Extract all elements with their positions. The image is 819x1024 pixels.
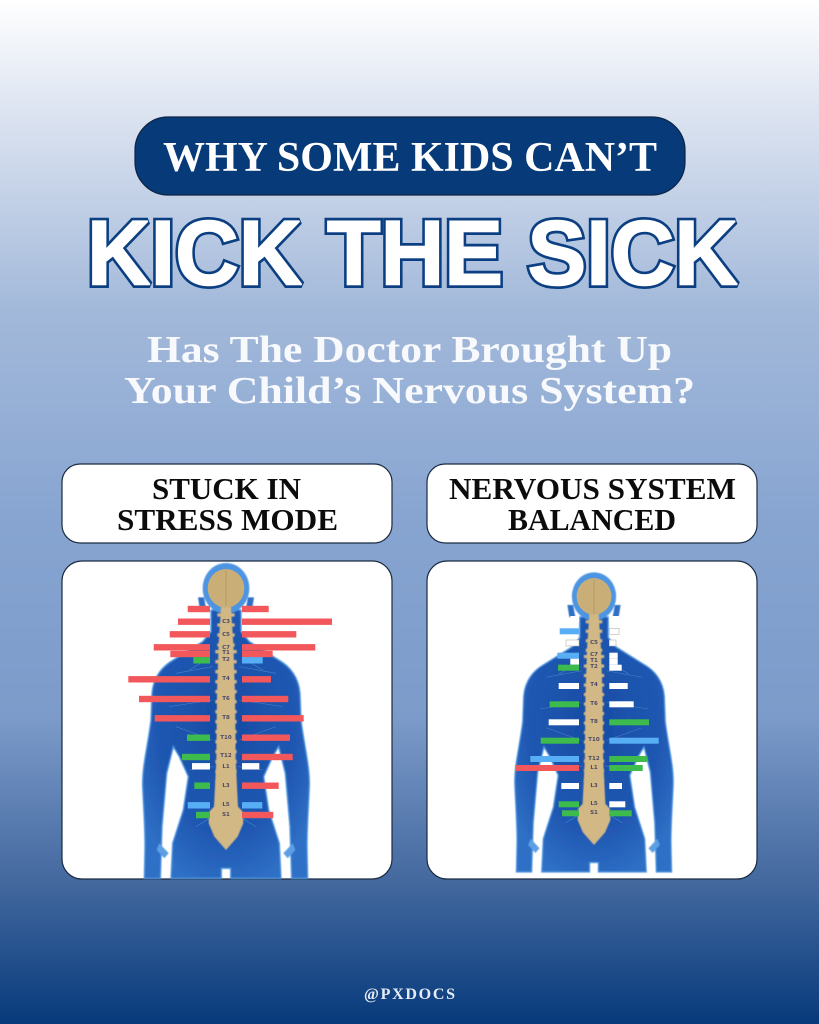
- spine level labels: [220, 619, 232, 818]
- footer handle: @PXDOCS: [364, 986, 455, 1003]
- spine level labels: T8: [222, 715, 230, 721]
- spine level labels: T6: [590, 701, 598, 707]
- spine level labels: L1: [590, 765, 598, 771]
- spine level labels: L3: [222, 783, 230, 789]
- label: nervous system balanced: NERVOUS SYSTEM: [449, 471, 736, 506]
- spine level labels: C5: [222, 632, 230, 638]
- spine level labels: T2: [590, 664, 598, 670]
- spine level labels: T8: [590, 719, 598, 725]
- spine level labels: T4: [222, 676, 230, 682]
- spine level labels: [588, 640, 600, 816]
- spine level labels: L3: [590, 783, 598, 789]
- label: stuck in stress mode: STUCK IN: [152, 471, 301, 506]
- spine level labels: C7: [222, 645, 230, 651]
- spine level labels: L5: [222, 802, 230, 808]
- spine level labels: T1: [590, 658, 598, 664]
- label: nervous system balanced: [427, 464, 757, 543]
- spine level labels: T4: [590, 682, 598, 688]
- spine level labels: S1: [222, 812, 230, 818]
- label: stuck in stress mode: STRESS MODE: [117, 502, 338, 537]
- spine level labels: T10: [588, 737, 600, 743]
- spine level labels: S1: [590, 810, 598, 816]
- spine level labels: C3: [222, 619, 230, 625]
- subtitle: Your Child’s Nervous System?: [124, 370, 695, 412]
- panel: stress mode spine chart: [62, 561, 392, 879]
- subtitle: [124, 329, 695, 412]
- title: kick the sick: KICK THE SICK: [87, 202, 738, 304]
- panel: balanced spine chart: [427, 561, 757, 879]
- figure: body and spine, stress mode: [143, 563, 309, 878]
- headline pill: WHY SOME KIDS CAN’T: [163, 135, 657, 181]
- spine level labels: T12: [588, 756, 600, 762]
- bars: left side: [515, 616, 579, 816]
- spine level labels: C7: [590, 652, 598, 658]
- spine level labels: T1: [222, 650, 230, 656]
- figure: body and spine, balanced: [515, 572, 673, 872]
- spine level labels: T2: [222, 657, 230, 663]
- title: kick the sick: KICK THE SICK: [87, 202, 738, 304]
- spine level labels: L5: [590, 801, 598, 807]
- spine level labels: C5: [590, 640, 598, 646]
- bars: right side: [242, 606, 332, 818]
- spine level labels: T6: [222, 696, 230, 702]
- label: nervous system balanced: BALANCED: [508, 502, 676, 537]
- spine level labels: T12: [220, 753, 232, 759]
- subtitle: Has The Doctor Brought Up: [147, 329, 672, 371]
- bars: left side: [128, 606, 210, 818]
- spine level labels: L1: [222, 764, 230, 770]
- spine level labels: T10: [220, 735, 232, 741]
- label: stuck in stress mode: [62, 464, 392, 543]
- headline pill: [135, 117, 685, 195]
- bars: right side: [609, 616, 659, 816]
